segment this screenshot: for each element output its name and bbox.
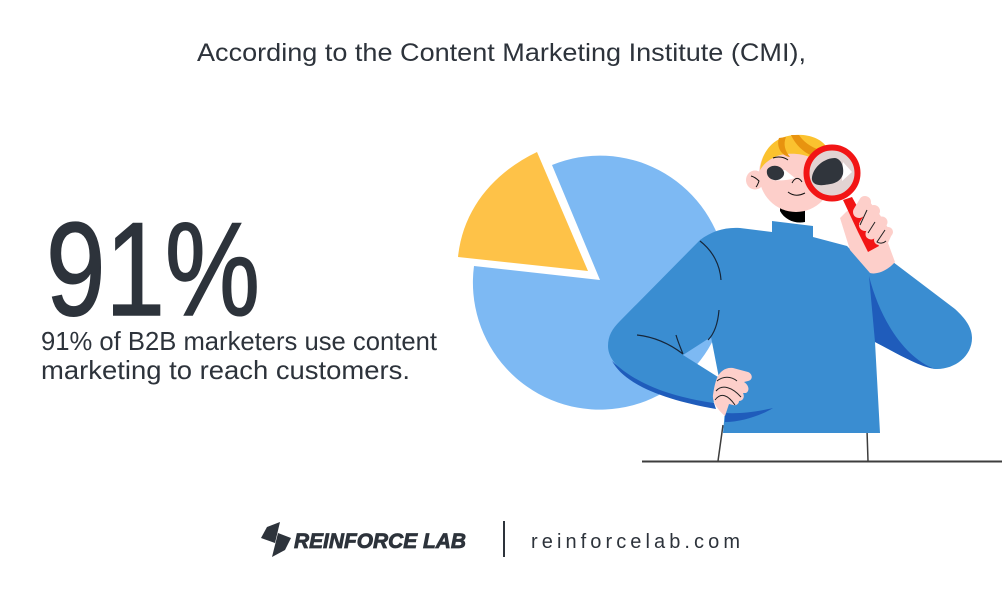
ear xyxy=(746,170,764,190)
ground line xyxy=(642,460,1002,462)
footer logo xyxy=(261,522,466,557)
footer divider xyxy=(503,521,505,557)
description text: 91% of B2B marketers use content xyxy=(41,326,438,356)
description text: marketing to reach customers. xyxy=(41,355,410,385)
brow, nose and mouth xyxy=(751,157,805,195)
description text xyxy=(41,326,438,385)
character: person with magnifying glass xyxy=(608,135,1002,461)
sweater xyxy=(608,221,972,433)
finger lines xyxy=(715,377,741,405)
logo wordmark: REINFORCE LAB xyxy=(294,530,466,553)
hair highlights xyxy=(778,135,820,157)
eye white xyxy=(770,170,795,180)
enlarged eye xyxy=(812,158,843,185)
website url: reinforcelab.com xyxy=(531,531,740,553)
raised palm xyxy=(840,197,895,273)
pie chart xyxy=(458,152,727,410)
pie main slice xyxy=(473,156,727,410)
finger detail lines xyxy=(860,210,886,243)
lens glare xyxy=(842,162,852,181)
pie yellow slice xyxy=(458,152,588,271)
sleeve shadows xyxy=(612,361,716,409)
sweater fold lines xyxy=(637,241,721,354)
logo mark xyxy=(261,522,291,557)
big number: 91% xyxy=(46,196,260,344)
neck xyxy=(780,205,805,223)
hair xyxy=(760,135,826,170)
gripping fingers xyxy=(859,202,888,240)
magnifying glass lens xyxy=(806,148,858,198)
hand on hip xyxy=(713,368,752,416)
eye xyxy=(767,166,784,180)
magnifying glass handle xyxy=(843,197,879,252)
legs xyxy=(718,425,868,461)
head xyxy=(759,136,833,212)
title: According to the Content Marketing Institute (CMI), xyxy=(197,39,806,67)
